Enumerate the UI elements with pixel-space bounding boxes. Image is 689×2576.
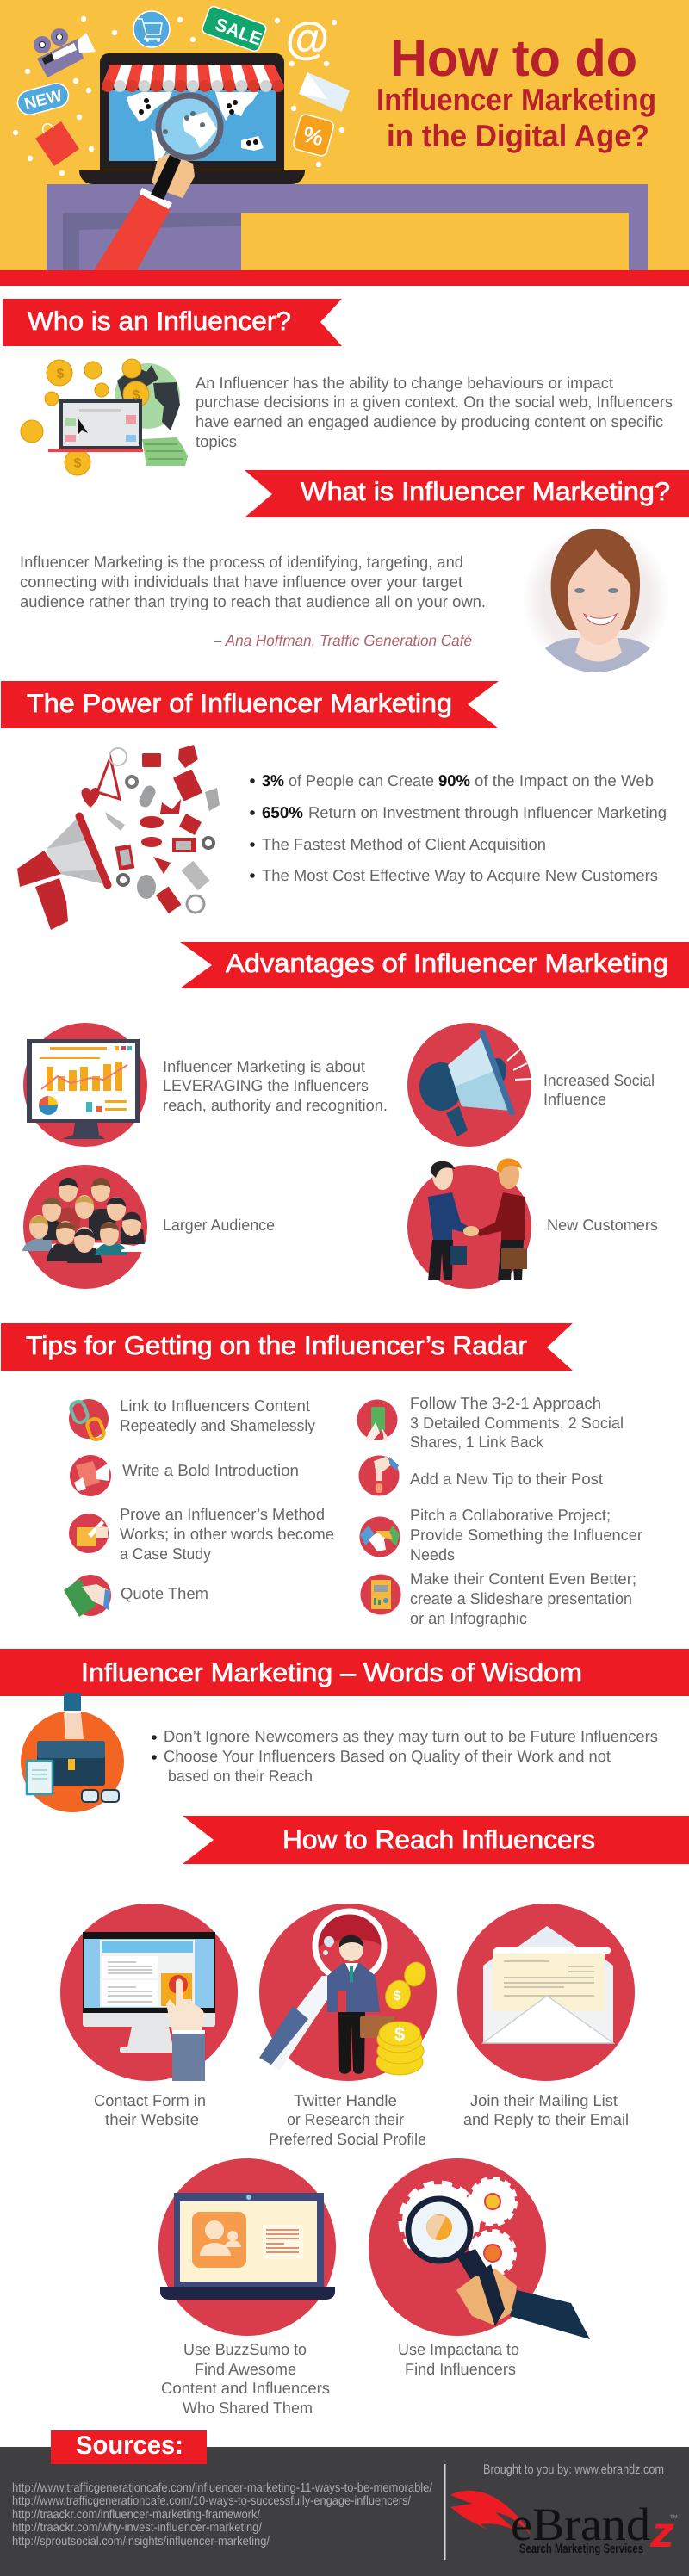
bullet list: Choose Your Influencers Based on Quality of their Work and not [164,1747,611,1765]
label: Larger Audience [163,1216,275,1234]
text: Follow The 3-2-1 Approach [410,1394,601,1412]
text: create a Slideshare presentation [410,1589,632,1607]
label [463,2091,629,2128]
header panel [0,0,689,270]
text: Make their Content Even Better; [410,1570,636,1588]
label: Who Shared Them [183,2399,313,2417]
eBrandz logo: TM [670,2514,678,2520]
source links: http://traackr.com/why-invest-influencer-marketing/ [12,2521,263,2535]
purple desk [47,184,648,270]
bullet list: based on their Reach [168,1767,313,1785]
item: new customers [407,1159,658,1289]
icon: coins, globe, laptop and money: $ [74,456,82,471]
text: Quote Them [121,1584,208,1602]
text: Repeatedly and Shamelessly [120,1416,316,1434]
item: twitter handle research [259,1904,437,2148]
text [120,1396,316,1434]
text: Write a Bold Introduction [122,1461,299,1479]
label: or Research their [287,2110,404,2128]
tip: prove a method [69,1505,334,1563]
icon: handshake [407,1159,531,1289]
section: words of wisdom [0,1649,689,1812]
text [410,1570,636,1627]
icon: shopping bag [35,121,79,166]
sources heading: Sources: [76,2431,183,2460]
text [410,1394,624,1451]
title [376,29,656,153]
bullet list: 650% [262,803,303,821]
icon: analytics monitor [23,1023,147,1147]
icon: chain link [69,1399,109,1441]
icon: phone in hands [357,1400,398,1442]
label: Contact Form in [94,2091,206,2109]
icon: hand holding briefcase [21,1693,124,1812]
icon: hand with banknote [64,1575,111,1617]
label: Content and Influencers [161,2379,330,2397]
bullet list: The Most Cost Effective Way to Acquire New Customers [262,866,658,884]
text: Needs [410,1545,455,1564]
decorative dots [13,16,344,176]
heading ribbon [1,1323,573,1371]
illustration: laptop storefront with world map [79,53,305,184]
tip: quote them [64,1575,208,1617]
sources heading [51,2430,207,2464]
icon: magnifier over businessman and coins: $ [394,2023,405,2045]
icon: SALE tag [201,5,267,53]
item: increased social influence [407,1023,655,1147]
icon: handshake [360,1517,400,1557]
heading ribbon: Who is an Influencer? [28,307,291,336]
icon: magnifier over businessman and coins: $ [394,1989,401,2003]
heading ribbon: Advantages of Influencer Marketing [226,950,668,978]
icon: SALE tag: SALE [213,15,264,50]
source links: http://traackr.com/influencer-marketing-framework/ [12,2508,261,2522]
body text: An Influencer has the ability to change behaviours or impact [196,374,613,392]
icon: megaphone with media icons [17,745,220,930]
icon: magnifier over gears [369,2158,590,2339]
icon: coins, globe, laptop and money: $ [133,388,140,403]
text [120,1505,334,1563]
icon: writing hand [70,1455,111,1496]
quote text: audience rather than trying to reach that audience all on your own. [20,592,486,610]
source links [12,2481,433,2548]
icon: laptop with profile card [158,2158,336,2336]
tip: make content better [360,1570,636,1627]
bullet list: 3% [262,771,284,790]
bullet list: of the Impact on the Web [475,771,654,790]
item: larger audience [22,1165,275,1289]
icon: NEW tag: NEW [22,87,65,114]
label: New Customers [547,1216,658,1234]
eBrandz logo: z [649,2508,674,2556]
bullet list [152,1727,658,1785]
icon: coins, globe, laptop and money: $ [57,367,65,381]
icon: slide presentation [360,1574,401,1615]
label: Increased Social [543,1071,655,1089]
heading ribbon [180,942,689,988]
heading ribbon: How to Reach Influencers [282,1826,595,1855]
heading ribbon [1,681,499,728]
icon: monitor with tapping hand [60,1904,238,2081]
tip: bold introduction [70,1455,299,1496]
bullet list: 90% [438,771,470,790]
label: Join their Mailing List [470,2091,618,2109]
section: how to reach influencers [60,1816,689,2417]
tip: add a new tip [358,1455,603,1496]
eBrandz logo: eBrand [511,2499,650,2550]
heading band: Influencer Marketing – Words of Wisdom [81,1659,582,1687]
icon: magnifier held by hand [94,96,220,270]
text: 3 Detailed Comments, 2 Social [410,1414,624,1432]
label [543,1071,655,1108]
body text: purchase decisions in a given context. On the social web, Influencers [196,393,673,411]
body text [196,374,673,450]
icon: open envelope with letter [457,1904,635,2081]
tip: 3-2-1 approach [357,1394,624,1451]
section: what is influencer marketing [20,470,689,673]
tip: collaborative project [360,1506,642,1564]
portrait photo [522,525,670,673]
red band [0,270,689,286]
item: mailing list [457,1904,635,2128]
label: LEVERAGING the Influencers [163,1076,369,1094]
eBrandz logo: Search Marketing Services [519,2542,643,2556]
title: How to do [390,29,637,87]
label [269,2091,426,2148]
tip: link to influencers [69,1396,316,1441]
label: Influence [543,1090,606,1108]
quote text [20,553,486,610]
label: Twitter Handle [294,2091,397,2109]
text: Provide Something the Influencer [410,1526,642,1544]
bullet list: Don’t Ignore Newcomers as they may turn out to be Future Influencers [164,1727,658,1745]
heading band [0,1649,689,1696]
icon: megaphone [407,1023,531,1147]
text [410,1506,642,1564]
label: reach, authority and recognition. [163,1096,388,1114]
bullet list [250,771,667,884]
label [94,2091,206,2128]
label: Find Awesome [195,2360,296,2378]
label: Find Influencers [405,2360,516,2378]
icon: at sign: @ [286,14,329,64]
footer panel [0,2430,689,2576]
text: Pitch a Collaborative Project; [410,1506,611,1524]
bullet list: of People can Create [289,771,434,790]
heading ribbon [3,299,342,346]
section: tips for getting on the influencer's radar [1,1323,642,1627]
section: advantages of influencer marketing [22,942,689,1289]
eBrandz logo [450,2491,678,2556]
icon: calendar sheet [69,1514,109,1553]
title: Influencer Marketing [376,82,656,117]
source links: http://www.trafficgenerationcafe.com/10-ways-to-successfully-engage-influencers/ [12,2494,412,2508]
label [163,1057,388,1114]
section: the power of influencer marketing [1,681,667,930]
quote text: connecting with individuals that have influence over your target [20,573,462,591]
item: contact form [60,1904,238,2128]
heading ribbon [245,470,689,517]
source links: http://sproutsocial.com/insights/influencer-marketing/ [12,2535,270,2548]
body text: topics [196,432,237,450]
bullet list: Return on Investment through Influencer Marketing [308,803,667,821]
title: in the Digital Age? [387,118,649,153]
section: who is an influencer [3,299,673,475]
item: leveraging influencers [23,1023,388,1147]
label: Use Impactana to [398,2340,519,2358]
icon: envelope [299,72,350,112]
text: Shares, 1 Link Back [410,1433,544,1451]
heading ribbon: The Power of Influencer Marketing [27,690,452,718]
label: their Website [105,2110,199,2128]
heading ribbon: Tips for Getting on the Influencer’s Radar [26,1332,527,1360]
icon: NEW tag [15,81,71,117]
text: Link to Influencers Content [120,1396,310,1415]
label [161,2340,330,2417]
text: Prove an Influencer’s Method [120,1505,325,1523]
label [398,2340,519,2378]
text: or an Infographic [410,1609,527,1627]
label: and Reply to their Email [463,2110,629,2128]
quote attribution: – Ana Hoffman, Traffic Generation Café [213,632,472,649]
text: Add a New Tip to their Post [410,1470,603,1488]
label: Use BuzzSumo to [183,2340,307,2358]
bullet list: The Fastest Method of Client Acquisition [262,835,546,853]
item: impactana [369,2158,590,2378]
body text: have earned an engaged audience by producing content on specific [196,412,663,430]
icon: shopping cart [133,11,170,47]
label: Influencer Marketing is about [163,1057,365,1075]
icon: magnifier over businessman and coins [259,1904,437,2081]
heading ribbon [183,1816,689,1864]
icon: percent tag: % [301,121,326,151]
text: a Case Study [120,1545,212,1563]
source links: http://www.trafficgenerationcafe.com/influencer-marketing-11-ways-to-be-memorable/ [12,2481,433,2495]
label: Preferred Social Profile [269,2130,426,2148]
item: buzzsumo [158,2158,336,2417]
icon: coins, globe, laptop and money [21,359,188,475]
icon: percent tag [292,114,335,157]
quote text: Influencer Marketing is the process of identifying, targeting, and [20,553,463,571]
icon: crowd of people [22,1165,147,1289]
icon: film camera [34,28,96,77]
text: Works; in other words become [120,1525,334,1543]
heading ribbon: What is Influencer Marketing? [301,478,670,506]
icon: hand with pen [358,1455,400,1496]
